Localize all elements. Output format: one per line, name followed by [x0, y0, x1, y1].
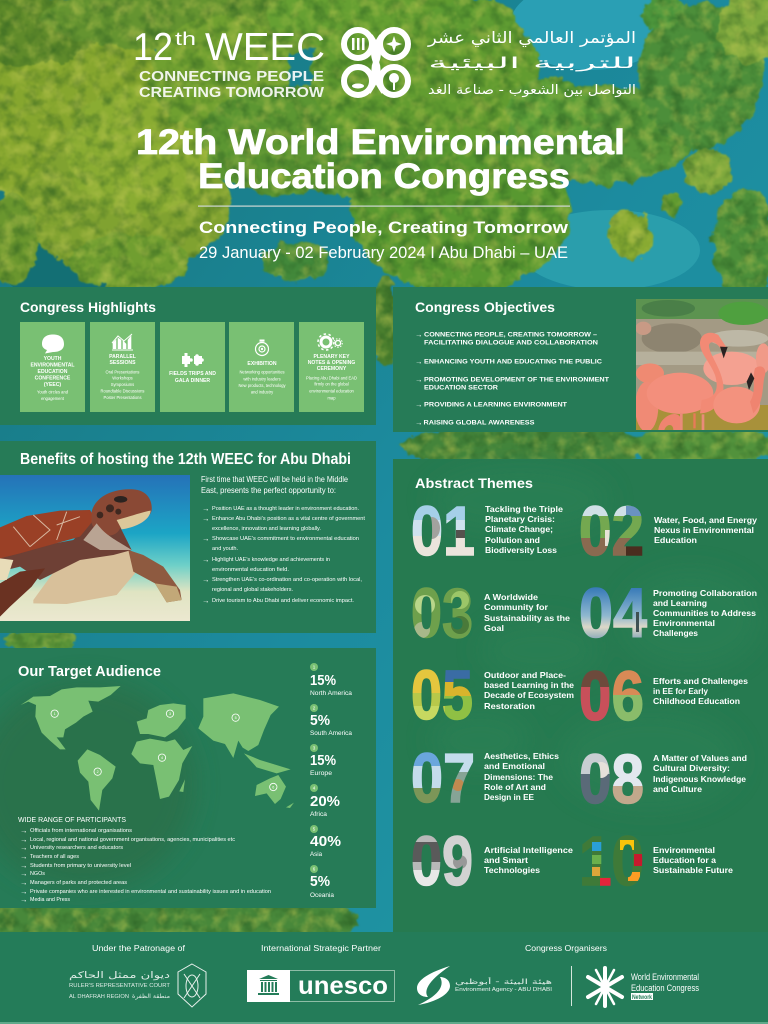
benefits list: Strengthen UAE’s co-ordination and co-operation with local,	[212, 577, 362, 583]
participants list: Media and Press	[30, 897, 70, 903]
heading: Our Target Audience	[18, 664, 161, 680]
logo wordmark: CREATING TOMORROW	[139, 85, 324, 101]
objectives list: CONNECTING PEOPLE, CREATING TOMORROW –	[424, 332, 597, 338]
panel: target audience	[0, 648, 376, 908]
organisers logos: World Environmental	[631, 972, 699, 982]
region statistics: 5%	[310, 874, 330, 890]
Arabic logo text: التواصل بين الشعوب - صناعة الغد	[428, 83, 636, 98]
theme 04: Promoting Collaboration	[653, 588, 757, 598]
logo wordmark: th	[175, 29, 196, 49]
participants list: →	[20, 887, 28, 896]
theme 05: Restoration	[484, 701, 535, 711]
card: plenary keynotes: firmly on the global	[314, 382, 349, 386]
card: exhibition: Networking opportunities	[239, 370, 285, 374]
organisers logos: Environment Agency - ABU DHABI	[455, 987, 552, 993]
theme 04: and Learning	[653, 598, 707, 608]
Arabic logo text: للتربية البيئية	[428, 54, 636, 72]
card: plenary keynotes: NOTES & OPENING	[308, 360, 355, 366]
theme 10: Environmental	[653, 845, 715, 855]
theme 05: based Learning in the	[484, 680, 574, 690]
region statistics: 1	[313, 665, 316, 670]
region statistics: 2	[313, 706, 316, 711]
participants list: →	[20, 843, 28, 852]
benefits list: Highlight UAE’s knowledge and achievements in	[212, 557, 330, 563]
card: parallel sessions: Symposiums	[111, 382, 134, 387]
subtitle and dates: Connecting People, Creating Tomorrow	[199, 218, 569, 237]
region statistics: South America	[310, 730, 353, 737]
theme 05	[411, 656, 574, 734]
theme 04	[579, 574, 757, 652]
organisers logos	[417, 944, 699, 1006]
icon: falcon emblem	[178, 964, 206, 1007]
objectives list: RAISING GLOBAL AWARENESS	[424, 420, 535, 426]
theme 09: and Smart	[484, 855, 528, 865]
region statistics: 4	[313, 786, 316, 791]
theme 06: Childhood Education	[653, 696, 740, 706]
logo wordmark: 12	[133, 26, 173, 69]
patronage column: منطقة الظفرة	[132, 993, 170, 1000]
card: exhibition	[229, 322, 294, 412]
card: exhibition: and industry	[251, 390, 274, 394]
title	[136, 123, 625, 196]
region statistics: Europe	[310, 770, 333, 777]
card: plenary keynotes: map	[328, 396, 336, 400]
photo: flamingos	[635, 299, 768, 432]
theme 06	[579, 657, 748, 735]
theme 10: Education for a	[653, 855, 716, 865]
region statistics	[310, 663, 353, 899]
benefits list: →	[202, 514, 210, 523]
objectives list: EDUCATION SECTOR	[424, 384, 498, 392]
benefits list: →	[202, 555, 210, 564]
panel: congress objectives	[393, 287, 768, 432]
icon: environment agency swoosh	[417, 966, 450, 1005]
participants list: →	[20, 835, 28, 844]
theme 08	[579, 740, 747, 818]
UNESCO partner logo: unesco	[298, 972, 388, 1000]
objectives list: →	[415, 357, 422, 366]
region statistics: 15%	[310, 673, 336, 689]
objectives list: FACILITATING DIALOGUE AND COLLABORATION	[424, 340, 598, 346]
theme 03: Sustainability as the	[484, 613, 570, 623]
world map: 3	[169, 712, 171, 716]
theme 10	[579, 822, 733, 900]
participants list: →	[20, 861, 28, 870]
theme 09	[411, 822, 573, 900]
theme 07: Aesthetics, Ethics	[484, 751, 559, 761]
subtitle and dates: 29 January - 02 February 2024 I Abu Dhabi – UAE	[199, 243, 568, 262]
theme 01: Tackling the Triple	[485, 504, 563, 514]
participants list: Private companies who are interested in environmental and sustainability issues and in education	[30, 889, 271, 895]
icon: WEEC network snowflake	[588, 968, 622, 1006]
theme 06: 06	[579, 657, 644, 735]
theme 08: A Matter of Values and	[653, 753, 747, 763]
participants list: Officials from international organisations	[30, 828, 132, 834]
patronage column: RULER'S REPRESENTATIVE COURT	[69, 983, 171, 989]
subtitle and dates	[199, 218, 569, 262]
card: parallel sessions: Workshops	[112, 376, 133, 380]
theme 09: Technologies	[484, 865, 540, 875]
benefits list: regional and global stakeholders.	[212, 587, 293, 593]
logo wordmark: CONNECTING PEOPLE	[139, 69, 324, 85]
participants list: Managers of parks and protected areas	[30, 880, 127, 886]
world map: 6	[272, 785, 274, 789]
region statistics: 5	[313, 827, 316, 832]
participants heading: WIDE RANGE OF PARTICIPANTS	[18, 817, 126, 824]
theme 09: Artificial Intelligence	[484, 845, 573, 855]
footer: partners band	[0, 932, 768, 1024]
intro text: First time that WEEC will be held in the Middle	[201, 475, 348, 484]
participants list: →	[20, 826, 28, 835]
theme 08: Cultural Diversity:	[653, 763, 730, 773]
card: youth conference: (YEEC)	[44, 382, 61, 388]
participants list: Students from primary to university level	[30, 863, 131, 869]
theme 07: Design in EE	[484, 792, 534, 802]
theme 03: Community for	[484, 602, 549, 612]
card: field trips	[160, 322, 225, 412]
benefits list: and youth.	[212, 546, 238, 552]
benefits list: Enhance Abu Dhabi’s position as a vital centre of government	[212, 516, 366, 522]
card: exhibition: New products, technology	[238, 383, 287, 388]
objectives list: →	[415, 418, 422, 427]
icon: temple	[258, 975, 279, 995]
intro text	[201, 475, 348, 495]
region statistics: 20%	[310, 794, 340, 810]
logo wordmark	[133, 26, 325, 101]
heading: Benefits of hosting the 12th WEEC for Abu Dhabi	[20, 451, 351, 468]
world map: 1	[54, 712, 56, 716]
photo: sea turtle	[0, 475, 190, 621]
benefits list: excellence, innovation and learning globally.	[212, 526, 321, 532]
patronage column: ديوان ممثل الحاكم	[69, 971, 170, 981]
organisers logos: هيئة البيئة - أبوظبي	[455, 977, 553, 986]
card: field trips: FIELDS TRIPS AND	[169, 371, 216, 377]
theme 03: A Worldwide	[484, 592, 538, 602]
Arabic logo text	[427, 28, 636, 98]
card: plenary keynotes: Placing Abu Dhabi and EAD	[306, 376, 357, 380]
theme 07: Role of Art and	[484, 782, 546, 792]
theme 06: Efforts and Challenges	[653, 676, 748, 686]
card: youth conference: EDUCATION	[38, 369, 68, 375]
participants list: University researchers and educators	[30, 845, 123, 851]
theme 02: Education	[654, 535, 697, 545]
panel: abstract themes	[393, 459, 768, 934]
card: parallel sessions: Roundtable Discussions	[101, 388, 144, 394]
card: exhibition: EXHIBITION	[247, 361, 277, 367]
theme 10: 10	[579, 822, 644, 900]
card: exhibition: with industry leaders	[243, 376, 281, 382]
card: plenary keynotes: PLENARY KEY	[314, 354, 350, 360]
logo wordmark: WEEC	[205, 26, 325, 69]
participants list: Teachers of all ages	[30, 854, 79, 860]
benefits list: →	[202, 596, 210, 605]
card: youth conference: CONFERENCE	[35, 376, 71, 382]
objectives list: →	[415, 375, 422, 384]
theme 01: Pollution and	[485, 535, 540, 545]
world map	[21, 686, 294, 811]
benefits list: →	[202, 575, 210, 584]
card: parallel sessions: Oral Presentations	[106, 370, 139, 374]
benefits list: Showcase UAE’s commitment to environmental education	[212, 536, 359, 542]
card: parallel sessions: PARALLEL	[109, 354, 136, 360]
patronage column: AL DHAFRAH REGION	[69, 994, 129, 1000]
benefits list: Drive tourism to Abu Dhabi and deliver economic impact.	[212, 598, 354, 604]
region statistics: 3	[313, 746, 316, 751]
theme 02: 02	[579, 492, 644, 570]
benefits list: →	[202, 504, 210, 513]
organisers logos: Network	[632, 995, 653, 1001]
card: youth conference: YOUTH	[44, 356, 62, 362]
objectives list: →	[415, 400, 422, 409]
card: plenary keynotes: CEREMONY	[317, 366, 347, 372]
theme 05: 05	[411, 656, 473, 734]
theme 08: Indigenous Knowledge	[653, 774, 746, 784]
card: plenary keynotes	[299, 322, 364, 412]
card: youth conference: ENVIRONMENTAL	[30, 362, 75, 368]
region statistics: 15%	[310, 753, 336, 769]
card: youth conference: engagement	[41, 396, 65, 401]
organisers logos: Congress Organisers	[525, 944, 607, 953]
heading: Abstract Themes	[415, 475, 533, 491]
benefits list: →	[202, 534, 210, 543]
patronage column	[69, 944, 206, 1007]
theme 01: Climate Change;	[485, 524, 553, 534]
objectives list: →	[415, 330, 422, 339]
header: WEEC logo lockup	[133, 26, 636, 101]
objectives list: PROVIDING A LEARNING ENVIRONMENT	[424, 402, 567, 408]
theme 07: Dimensions: The	[484, 772, 553, 782]
title: Education Congress	[198, 157, 570, 196]
world map: 2	[97, 770, 99, 774]
patronage column: Under the Patronage of	[92, 944, 186, 953]
card: parallel sessions: Poster Presentations	[103, 395, 142, 400]
theme 04: 04	[579, 574, 647, 652]
theme 01: 01	[411, 492, 475, 570]
participants list: →	[20, 878, 28, 887]
theme 07: 07	[411, 739, 475, 817]
theme 01: Biodiversity Loss	[485, 545, 557, 555]
participants list: Local, regional and national government organisations, agencies, municipalities etc	[30, 837, 235, 843]
theme 04: Environmental	[653, 618, 715, 628]
card: parallel sessions: SESSIONS	[109, 360, 136, 366]
theme 02	[579, 492, 757, 570]
card: field trips: GALA DINNER	[175, 378, 210, 384]
card: youth conference	[20, 322, 85, 412]
icon: interlocked rings emblem	[344, 30, 408, 95]
region statistics: Asia	[310, 851, 322, 858]
objectives list: PROMOTING DEVELOPMENT OF THE ENVIRONMENT	[424, 376, 609, 384]
benefits list	[202, 504, 366, 605]
region statistics: 6	[313, 867, 316, 872]
theme 03	[411, 574, 570, 652]
UNESCO partner logo: International Strategic Partner	[261, 944, 381, 953]
theme 08: and Culture	[653, 784, 702, 794]
world map: 4	[161, 756, 163, 760]
region statistics: Africa	[310, 811, 328, 818]
theme 07	[411, 739, 559, 817]
organisers logos: Education Congress	[631, 983, 699, 993]
objectives list: ENHANCING YOUTH AND EDUCATING THE PUBLIC	[424, 358, 602, 366]
theme 02: Water, Food, and Energy	[654, 515, 757, 525]
participants list	[20, 826, 271, 904]
card: plenary keynotes: environmental education	[309, 388, 355, 394]
panel: congress highlights	[0, 287, 376, 425]
theme 03: Goal	[484, 623, 504, 633]
participants list: →	[20, 852, 28, 861]
theme 02: Nexus in Environmental	[654, 525, 754, 535]
theme 05: Decade of Ecosystem	[484, 690, 574, 700]
theme 03: 03	[411, 574, 473, 652]
Arabic logo text: المؤتمر العالمي الثاني عشر	[427, 28, 636, 48]
theme 08: 08	[579, 740, 644, 818]
theme 10: Sustainable Future	[653, 865, 733, 875]
title: 12th World Environmental	[136, 123, 625, 162]
heading: Congress Highlights	[20, 299, 156, 315]
theme 06: in EE for Early	[653, 686, 708, 696]
participants list: →	[20, 869, 28, 878]
theme 05: Outdoor and Place-	[484, 670, 566, 680]
region statistics: 5%	[310, 713, 330, 729]
heading: Congress Objectives	[415, 299, 555, 315]
participants list: NGOs	[30, 871, 45, 877]
benefits list: environmental education field.	[212, 567, 289, 573]
card: youth conference: Youth circles and	[37, 390, 69, 394]
panel: benefits of hosting	[0, 441, 376, 633]
world map: 5	[235, 716, 237, 720]
region statistics: Oceania	[310, 892, 334, 899]
benefits list: Position UAE as a thought leader in environment education.	[212, 506, 359, 512]
intro text: East, presents the perfect opportunity to:	[201, 486, 336, 495]
card: parallel sessions	[90, 322, 155, 412]
theme 04: Communities to Address	[653, 608, 756, 618]
objectives list	[415, 330, 609, 427]
theme 04: Challenges	[653, 628, 698, 638]
participants list: →	[20, 895, 28, 904]
theme 01	[411, 492, 563, 570]
region statistics: North America	[310, 690, 353, 697]
theme 01: Planetary Crisis:	[485, 514, 555, 524]
UNESCO partner logo	[247, 944, 394, 1002]
region statistics: 40%	[310, 834, 341, 850]
theme 07: and Emotional	[484, 761, 545, 771]
theme 09: 09	[411, 822, 473, 900]
